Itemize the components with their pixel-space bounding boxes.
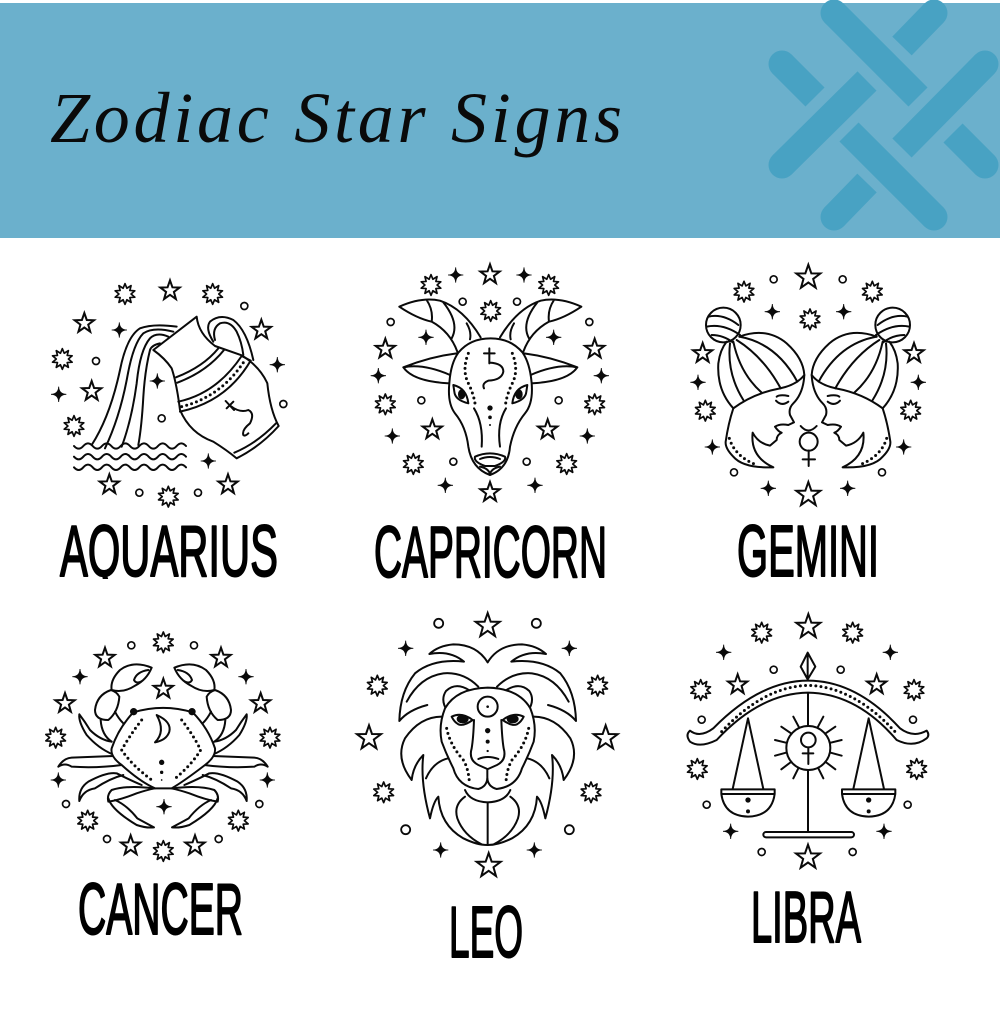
right pan [842,718,895,817]
lion face [441,686,535,845]
water jug [153,317,279,458]
left pan [721,718,775,817]
title: Zodiac Star Signs [50,78,622,158]
logo: woven cross [768,0,998,230]
right claws and legs [171,664,268,828]
sun with venus symbol [775,717,842,778]
capricorn stars [371,264,609,501]
label: aquarius: AQUARIUS [60,512,278,592]
mane left [399,644,488,845]
icon: libra [687,614,928,868]
taurus venus symbol [800,426,818,466]
horns and ears [399,300,581,383]
icon: gemini [690,265,926,505]
header banner [0,3,1000,238]
label: gemini: GEMINI [737,512,879,592]
goat head [449,338,532,475]
icon: cancer [46,632,280,861]
libra stars [687,614,926,868]
label: capricorn: CAPRICORN [374,513,607,593]
label: libra: LIBRA [751,878,861,958]
left twin [706,308,804,467]
scale stand and beam [687,653,928,837]
water stream and waves [74,325,186,470]
aquarius stars [51,280,287,507]
label: cancer: CANCER [78,870,243,950]
icon: aquarius [51,280,287,507]
icon: leo [357,613,618,876]
icon: capricorn [371,264,609,501]
gemini stars [690,265,926,505]
crab body [111,708,215,788]
mane right [488,644,576,845]
label: leo: LEO [449,893,523,973]
cancer stars [46,632,280,861]
left claws and legs [58,664,155,828]
leo stars [357,613,618,876]
right twin [812,308,910,467]
